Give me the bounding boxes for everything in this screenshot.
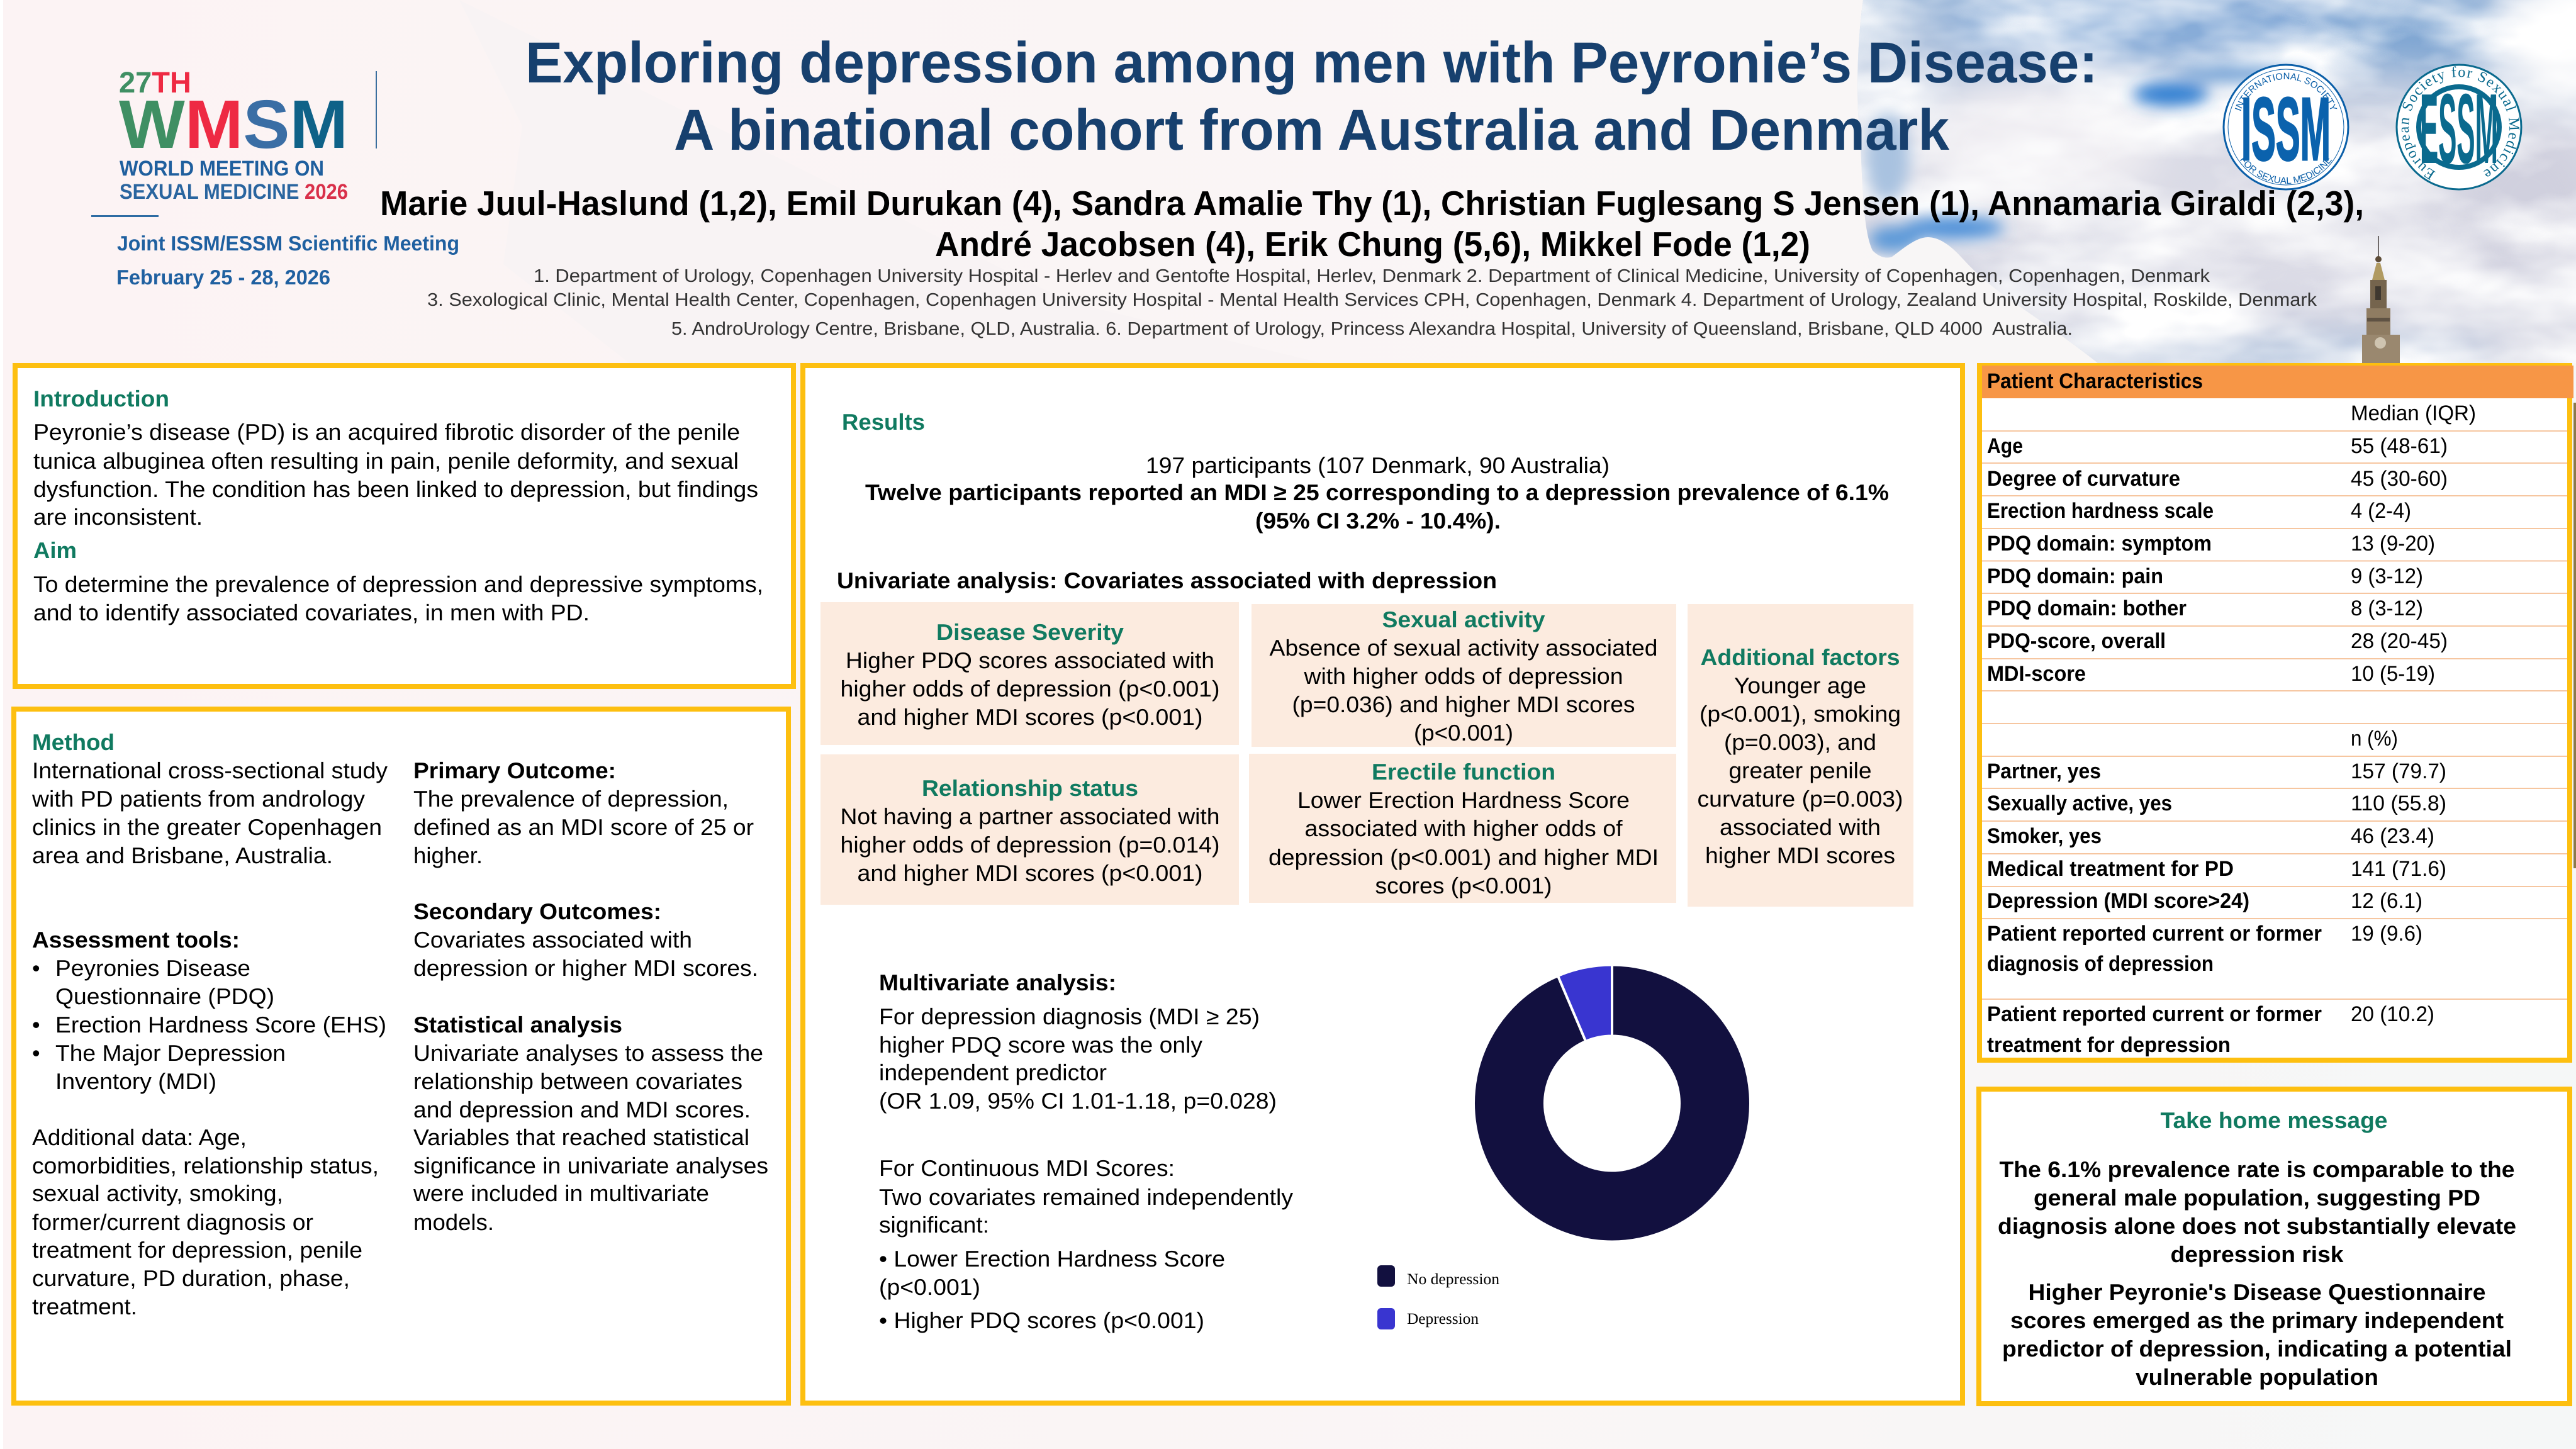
text: statistical analysis: and depression and MDI scores. bbox=[413, 1097, 751, 1122]
text: introduction body bbox=[33, 419, 758, 530]
table row lines bbox=[1982, 431, 2567, 999]
card: disease severity: higher odds of depression (p<0.001) bbox=[841, 676, 1219, 702]
text: predictor message: Higher Peyronie's Disease Questionnaire bbox=[2029, 1279, 2485, 1305]
table rows: categorical: 46 (23.4) bbox=[2351, 824, 2434, 848]
text: multivariate analysis: For Continuous MDI Scores: bbox=[879, 1155, 1175, 1181]
text: multivariate analysis: • Lower Erection Hardness Score bbox=[879, 1246, 1225, 1272]
text: multivariate analysis: higher PDQ score was the only bbox=[879, 1032, 1202, 1058]
table rows: continuous: 10 (5-19) bbox=[2351, 662, 2435, 686]
panel: patient characteristics table bbox=[1980, 366, 2573, 1060]
table column head: median: Median (IQR) bbox=[2351, 401, 2476, 425]
affiliations: 1. Department of Urology, Copenhagen University Hospital - Herlev and Gentofte Hospital, Herlev, Denmark 2. Department of Clinical Medicine, University of Copenhagen, Copenhagen, Denmark bbox=[534, 266, 2210, 286]
title: Exploring depression among men with Peyronie’s Disease: bbox=[525, 31, 2098, 95]
panel: take home message bbox=[1979, 1089, 2570, 1404]
text: aim body bbox=[33, 571, 763, 625]
table rows: categorical: 141 (71.6) bbox=[2351, 857, 2446, 881]
table rows: continuous: Erection hardness scale bbox=[1987, 499, 2214, 523]
table rows: categorical: Partner, yes bbox=[1987, 759, 2101, 783]
table rows: categorical: 20 (10.2) bbox=[2351, 1002, 2434, 1026]
text: introduction body: tunica albuginea often resulting in pain, penile deformity, and sexual bbox=[33, 448, 739, 474]
text: introduction body: dysfunction. The condition has been linked to depression, but findings bbox=[33, 476, 758, 502]
table rows: categorical bbox=[1987, 759, 2446, 1057]
title: A binational cohort from Australia and Denmark bbox=[674, 98, 1950, 162]
text: predictor message bbox=[2002, 1279, 2512, 1390]
text: assessment tools: Inventory (MDI) bbox=[55, 1068, 216, 1094]
card: erectile function bbox=[1249, 754, 1676, 903]
logo edition number: 27TH bbox=[119, 65, 191, 99]
card: additional factors bbox=[1688, 604, 1913, 907]
text: assessment tools: Assessment tools: bbox=[32, 927, 240, 953]
card: sexual activity: (p=0.036) and higher MDI scores bbox=[1292, 691, 1635, 717]
text: statistical analysis: Variables that reached statistical bbox=[413, 1124, 749, 1150]
table rows: continuous: 45 (30-60) bbox=[2351, 467, 2448, 491]
text: study description: clinics in the greater Copenhagen bbox=[32, 814, 382, 840]
card: additional factors: Additional factors bbox=[1700, 644, 1900, 670]
table rows: continuous: MDI-score bbox=[1987, 662, 2086, 686]
card: erectile function: scores (p<0.001) bbox=[1375, 873, 1552, 898]
heading: univariate analysis: Univariate analysis: Covariates associated with depression bbox=[837, 568, 1497, 593]
logo: ESSM: European Society for Sexual Medicine bbox=[2401, 66, 2519, 180]
text: prevalence message: general male population, suggesting PD bbox=[2034, 1185, 2480, 1211]
text: assessment tools: • bbox=[32, 1040, 40, 1066]
text: aim body: To determine the prevalence of depression and depressive symptoms, bbox=[33, 571, 763, 597]
sky photo header bbox=[1825, 0, 2576, 372]
text: primary outcome: higher. bbox=[413, 842, 483, 868]
table rows: continuous: PDQ-score, overall bbox=[1987, 629, 2166, 653]
authors: André Jacobsen (4), Erik Chung (5,6), Mikkel Fode (1,2) bbox=[935, 225, 1810, 264]
text: assessment tools: • bbox=[32, 1012, 40, 1038]
card: relationship status bbox=[820, 754, 1239, 905]
panel: introduction bbox=[15, 366, 793, 686]
card: erectile function: Lower Erection Hardness Score bbox=[1297, 787, 1630, 813]
card: additional factors: Younger age bbox=[1734, 673, 1866, 698]
card: erectile function: Erectile function bbox=[1372, 759, 1555, 785]
text: predictor message: scores emerged as the primary independent bbox=[2010, 1307, 2504, 1333]
table rows: categorical: 157 (79.7) bbox=[2351, 759, 2446, 783]
text: primary outcome: The prevalence of depression, bbox=[413, 786, 729, 812]
affiliations: 5. AndroUrology Centre, Brisbane, QLD, Australia. 6. Department of Urology, Princess Alexandra Hospital, University of Queensland, Brisbane, QLD 4000 Australia. bbox=[671, 319, 2073, 339]
card: additional factors: greater penile bbox=[1729, 758, 1871, 783]
table rows: categorical: 19 (9.6) bbox=[2351, 922, 2422, 946]
text: primary outcome bbox=[413, 758, 754, 868]
text: statistical analysis bbox=[413, 1012, 768, 1235]
card: sexual activity: Absence of sexual activity associated bbox=[1270, 635, 1657, 661]
text: study description: International cross-sectional study bbox=[32, 758, 388, 783]
table rows: categorical: 110 (55.8) bbox=[2351, 792, 2446, 815]
text: additional data: curvature, PD duration, phase, bbox=[32, 1265, 350, 1291]
table rows: categorical: Patient reported current or former bbox=[1987, 922, 2322, 946]
heading: aim: Aim bbox=[33, 537, 77, 563]
table rows: continuous: PDQ domain: bother bbox=[1987, 596, 2187, 620]
table rows: continuous: 9 (3-12) bbox=[2351, 564, 2423, 588]
panel: results bbox=[803, 366, 1963, 1403]
table rows: categorical: diagnosis of depression bbox=[1987, 952, 2214, 976]
table rows: categorical: Depression (MDI score>24) bbox=[1987, 889, 2249, 913]
text: prevalence bbox=[865, 479, 1889, 534]
card: disease severity bbox=[820, 602, 1239, 745]
sliver of tower image at the right edge bbox=[2573, 403, 2576, 868]
card: disease severity: and higher MDI scores (p<0.001) bbox=[857, 704, 1203, 730]
card: additional factors: curvature (p=0.003) bbox=[1698, 786, 1903, 812]
card: disease severity: Higher PDQ scores associated with bbox=[846, 647, 1214, 673]
affiliations: 3. Sexological Clinic, Mental Health Center, Copenhagen, Copenhagen University Hospital - Mental Health Services CPH, Copenhagen, Denmark 4. Department of Urology, Zealand University Hospital, Roskilde, Denmark bbox=[427, 290, 2317, 310]
text: assessment tools bbox=[32, 927, 386, 1094]
card: sexual activity: (p<0.001) bbox=[1414, 720, 1513, 746]
text: prevalence message: depression risk bbox=[2171, 1241, 2344, 1267]
table rows: categorical: Patient reported current or former bbox=[1987, 1002, 2322, 1026]
table rows: continuous: Age bbox=[1987, 434, 2023, 458]
text: introduction body: Peyronie’s disease (PD) is an acquired fibrotic disorder of the penile bbox=[33, 419, 740, 445]
text: additional data: sexual activity, smoking, bbox=[32, 1180, 283, 1206]
text: additional data: comorbidities, relationship status, bbox=[32, 1153, 379, 1178]
table rows: continuous: 4 (2-4) bbox=[2351, 499, 2411, 523]
text: assessment tools: Peyronies Disease bbox=[55, 955, 250, 981]
table column head: n percent: n (%) bbox=[2351, 727, 2398, 751]
table rows: continuous: 8 (3-12) bbox=[2351, 596, 2423, 620]
chart legend bbox=[1377, 1265, 1500, 1329]
chart: depression donut bbox=[1474, 965, 1750, 1242]
card: additional factors: higher MDI scores bbox=[1705, 842, 1895, 868]
chart legend: Depression bbox=[1407, 1311, 1479, 1328]
meeting dates: February 25 - 28, 2026 bbox=[116, 266, 330, 289]
table rows: categorical: Sexually active, yes bbox=[1987, 792, 2172, 815]
text: additional data: treatment. bbox=[32, 1294, 137, 1319]
text: prevalence message: diagnosis alone does not substantially elevate bbox=[1998, 1213, 2516, 1239]
table title: Patient Characteristics bbox=[1987, 369, 2203, 393]
text: prevalence: (95% CI 3.2% - 10.4%). bbox=[1255, 508, 1501, 534]
logo: ISSM: INTERNATIONAL SOCIETY bbox=[2235, 73, 2337, 111]
logo meeting name second line: SEXUAL MEDICINE 2026 bbox=[120, 180, 348, 204]
text: secondary outcomes: Secondary Outcomes: bbox=[413, 898, 661, 924]
text: primary outcome: Primary Outcome: bbox=[413, 758, 616, 783]
table rows: continuous: Degree of curvature bbox=[1987, 467, 2180, 491]
table rows: categorical: treatment for depression bbox=[1987, 1033, 2231, 1057]
table rows: continuous: PDQ domain: pain bbox=[1987, 564, 2163, 588]
text: multivariate analysis bbox=[879, 970, 1293, 1333]
text: statistical analysis: Univariate analyses to assess the bbox=[413, 1040, 763, 1066]
text: multivariate analysis: • Higher PDQ scores (p<0.001) bbox=[879, 1307, 1204, 1333]
text: assessment tools: Questionnaire (PDQ) bbox=[55, 983, 274, 1009]
card: relationship status: and higher MDI scores (p<0.001) bbox=[857, 860, 1203, 886]
text: multivariate analysis: significant: bbox=[879, 1212, 989, 1238]
text: statistical analysis: relationship between covariates bbox=[413, 1068, 742, 1094]
heading: method: Method bbox=[32, 729, 115, 755]
logo: 27th WMSM bbox=[91, 65, 459, 289]
icon: clock tower bbox=[2362, 236, 2400, 365]
text: additional data: treatment for depression, penile bbox=[32, 1237, 362, 1263]
logo: ISSM: FOR SEXUAL MEDICINE bbox=[2240, 157, 2332, 184]
table rows: categorical: Medical treatment for PD bbox=[1987, 857, 2234, 881]
text: additional data: former/current diagnosis or bbox=[32, 1209, 313, 1235]
text: additional data: Additional data: Age, bbox=[32, 1124, 247, 1150]
text: assessment tools: The Major Depression bbox=[55, 1040, 286, 1066]
table header bbox=[1982, 366, 2573, 398]
heading: introduction: Introduction bbox=[33, 386, 169, 411]
text: secondary outcomes: depression or higher MDI scores. bbox=[413, 955, 758, 981]
authors: Marie Juul-Haslund (1,2), Emil Durukan (4), Sandra Amalie Thy (1), Christian Fuglesang S Jensen (1), Annamaria Giraldi (2,3), bbox=[380, 184, 2364, 223]
text: prevalence message: The 6.1% prevalence rate is comparable to the bbox=[2000, 1156, 2514, 1182]
text: primary outcome: defined as an MDI score of 25 or bbox=[413, 814, 754, 840]
card: disease severity: Disease Severity bbox=[936, 619, 1124, 645]
table rows: categorical: 12 (6.1) bbox=[2351, 889, 2422, 913]
text: additional data bbox=[32, 1124, 379, 1319]
text: participants: 197 participants (107 Denmark, 90 Australia) bbox=[1146, 452, 1610, 478]
title bbox=[525, 31, 2098, 162]
table rows: categorical: Smoker, yes bbox=[1987, 824, 2102, 848]
text: aim body: and to identify associated covariates, in men with PD. bbox=[33, 600, 590, 625]
table rows: continuous: 55 (48-61) bbox=[2351, 434, 2448, 458]
card: additional factors: (p<0.001), smoking bbox=[1700, 701, 1901, 727]
text: assessment tools: Erection Hardness Score (EHS) bbox=[55, 1012, 386, 1038]
table rows: continuous: 28 (20-45) bbox=[2351, 629, 2448, 653]
card: erectile function: depression (p<0.001) and higher MDI bbox=[1268, 844, 1659, 870]
text: study description: area and Brisbane, Australia. bbox=[32, 842, 333, 868]
card: additional factors: associated with bbox=[1720, 814, 1881, 840]
text: statistical analysis: were included in multivariate bbox=[413, 1180, 709, 1206]
logo divider bbox=[376, 71, 377, 148]
card: erectile function: associated with higher odds of bbox=[1305, 815, 1623, 841]
logo meeting name: WORLD MEETING ON bbox=[120, 157, 324, 181]
chart legend: No depression bbox=[1407, 1271, 1500, 1288]
card: relationship status: Relationship status bbox=[922, 775, 1138, 801]
text: prevalence message bbox=[1998, 1156, 2516, 1267]
text: study description bbox=[31, 758, 388, 868]
card: sexual activity: Sexual activity bbox=[1382, 607, 1545, 632]
text: statistical analysis: Statistical analysis bbox=[413, 1012, 622, 1038]
text: secondary outcomes bbox=[413, 898, 758, 981]
authors bbox=[380, 184, 2364, 264]
text: multivariate analysis: (p<0.001) bbox=[879, 1274, 980, 1300]
logo: ISSM bbox=[2222, 64, 2349, 190]
card: additional factors: (p=0.003), and bbox=[1724, 729, 1876, 755]
text: multivariate analysis: (OR 1.09, 95% CI 1.01-1.18, p=0.028) bbox=[879, 1088, 1277, 1114]
poster: ISSM bbox=[2241, 79, 2331, 179]
text: statistical analysis: significance in univariate analyses bbox=[413, 1153, 768, 1178]
heading: take home message: Take home message bbox=[2161, 1107, 2387, 1133]
logo rule bbox=[91, 215, 159, 217]
text: study description: with PD patients from andrology bbox=[31, 786, 365, 812]
text: multivariate analysis: For depression diagnosis (MDI ≥ 25) bbox=[879, 1004, 1260, 1029]
card: relationship status: Not having a partner associated with bbox=[841, 803, 1219, 829]
text: prevalence: Twelve participants reported an MDI ≥ 25 corresponding to a depression prevalence of 6.1% bbox=[865, 479, 1889, 505]
joint meeting line: Joint ISSM/ESSM Scientific Meeting bbox=[117, 232, 459, 255]
card: sexual activity bbox=[1252, 604, 1676, 747]
table rows: continuous: 13 (9-20) bbox=[2351, 532, 2435, 556]
card: sexual activity: with higher odds of depression bbox=[1303, 663, 1623, 689]
text: assessment tools: • bbox=[32, 955, 40, 981]
text: multivariate analysis: independent predictor bbox=[879, 1060, 1107, 1085]
heading: results: Results bbox=[842, 409, 925, 435]
text: predictor message: predictor of depression, indicating a potential bbox=[2002, 1336, 2512, 1362]
text: statistical analysis: models. bbox=[413, 1209, 494, 1235]
text: predictor message: vulnerable population bbox=[2136, 1364, 2378, 1390]
affiliations bbox=[427, 266, 2317, 339]
text: multivariate analysis: Two covariates remained independently bbox=[879, 1184, 1293, 1210]
text: introduction body: are inconsistent. bbox=[33, 504, 203, 530]
text: multivariate analysis: Multivariate analysis: bbox=[879, 970, 1116, 995]
table rows: continuous: PDQ domain: symptom bbox=[1987, 532, 2212, 556]
text: secondary outcomes: Covariates associated with bbox=[413, 927, 692, 953]
panel: method bbox=[14, 709, 788, 1403]
logo wordmark: WMSM bbox=[119, 86, 348, 163]
card: relationship status: higher odds of depression (p=0.014) bbox=[841, 832, 1219, 858]
table rows: continuous bbox=[1987, 434, 2448, 686]
